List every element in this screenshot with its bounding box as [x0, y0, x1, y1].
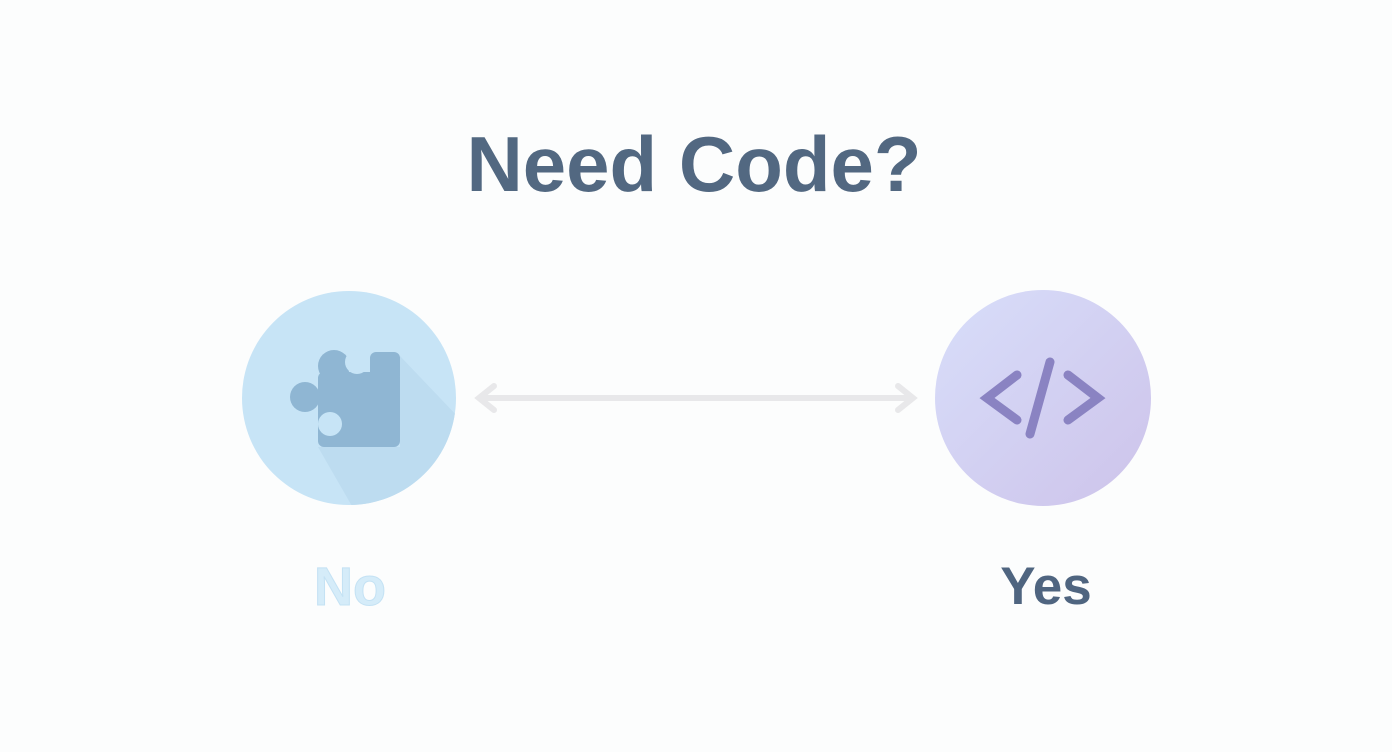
- title: Need Code?: [466, 120, 922, 208]
- icon: puzzle circle: [242, 291, 456, 505]
- icon: code circle: [935, 290, 1151, 506]
- arrow: double-headed: [479, 386, 913, 410]
- label: Yes: Yes: [1000, 557, 1092, 616]
- label: No: No: [314, 557, 386, 617]
- diagram: [242, 290, 1151, 506]
